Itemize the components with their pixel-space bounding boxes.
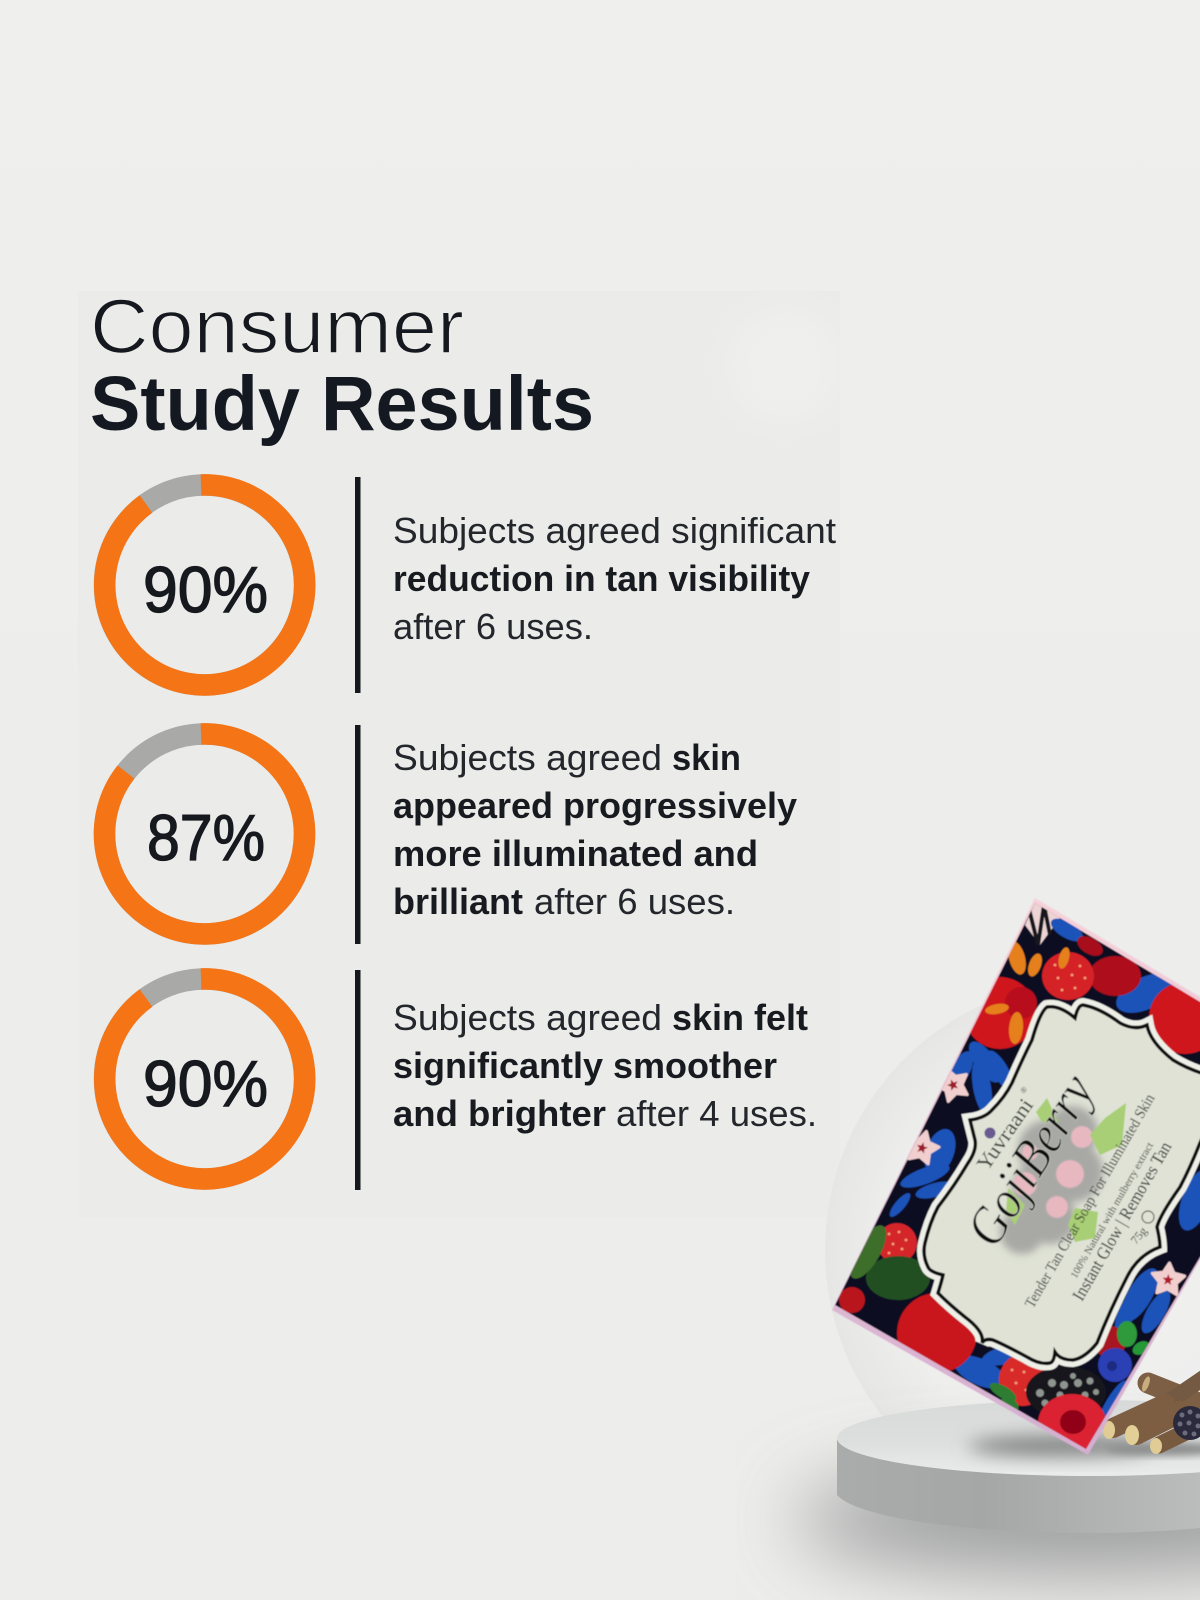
label outline (924, 1005, 1200, 1363)
value 87%: 87% (147, 801, 265, 874)
progress ring 87% (104, 734, 305, 934)
label text: Yuvraani (971, 1094, 1038, 1175)
progress ring 90% (104, 979, 305, 1179)
label text: GojiBerry (954, 1063, 1106, 1256)
description (393, 997, 817, 1134)
description: brilliant (393, 881, 523, 922)
podium shadow (795, 1468, 1200, 1572)
divider bar (355, 477, 360, 693)
stat row: 87% illuminated (104, 725, 797, 944)
label brand mark: berry (984, 1128, 996, 1138)
corner tint (1025, 903, 1060, 945)
description: after 6 uses. (393, 606, 593, 647)
label text: 100% Natural with mulberry extract (1069, 1141, 1156, 1280)
product: soap box (832, 898, 1200, 1455)
label text (954, 1063, 1175, 1311)
blue leaves (887, 914, 1200, 1433)
description: Subjects agreed significant (393, 510, 836, 551)
box artwork (835, 903, 1200, 1452)
description: after 4 uses. (616, 1093, 817, 1134)
description: appeared progressively (393, 785, 797, 826)
stat row: 90% tan visibility (104, 477, 836, 693)
panel: results backdrop (78, 291, 843, 1218)
podium top (837, 1400, 1200, 1476)
blossoms (903, 1063, 1186, 1295)
description: skin felt (672, 997, 808, 1038)
orange leaves (984, 940, 1072, 1045)
description (393, 737, 797, 922)
licorice sticks and blackberry (1103, 1375, 1200, 1454)
label plaque (924, 1005, 1200, 1363)
label text: Tender Tan Clear Soap For Illuminated Skin (1022, 1091, 1159, 1311)
label text: 75g (1128, 1224, 1150, 1247)
title: Consumer (90, 284, 464, 370)
divider bar (355, 970, 360, 1190)
strawberries (877, 952, 1094, 1406)
box edge (832, 898, 1200, 1455)
description: Subjects agreed (393, 997, 662, 1038)
blackberry (1025, 1366, 1106, 1412)
title: Study Results (90, 361, 594, 447)
description: Subjects agreed (393, 737, 662, 778)
red fruits (839, 932, 1200, 1373)
divider bar (355, 725, 360, 944)
description: and brighter (393, 1093, 606, 1134)
green foliage (843, 1220, 1152, 1415)
value 90%: 90% (143, 1047, 268, 1120)
description: more illuminated and (393, 833, 758, 874)
label watercolor berry (1000, 1098, 1126, 1254)
progress ring 90% (104, 485, 305, 685)
description: reduction in tan visibility (393, 558, 810, 599)
description: skin (672, 737, 741, 778)
backdrop disc behind product (825, 980, 1200, 1520)
raspberry (1038, 1394, 1106, 1452)
description (393, 510, 836, 647)
label text: ® (1018, 1085, 1029, 1095)
blueberry (1098, 1348, 1132, 1382)
description: significantly smoother (393, 1045, 777, 1086)
podium side (837, 1440, 1200, 1533)
title (90, 284, 594, 447)
value 90%: 90% (143, 553, 268, 626)
label certification badge (1142, 1211, 1154, 1223)
podium (837, 1400, 1200, 1533)
label text: Instant Glow | Removes Tan (1068, 1138, 1175, 1304)
description: after 6 uses. (534, 881, 735, 922)
stat row: 90% smoother (104, 970, 817, 1190)
contact shadow (968, 1436, 1152, 1456)
